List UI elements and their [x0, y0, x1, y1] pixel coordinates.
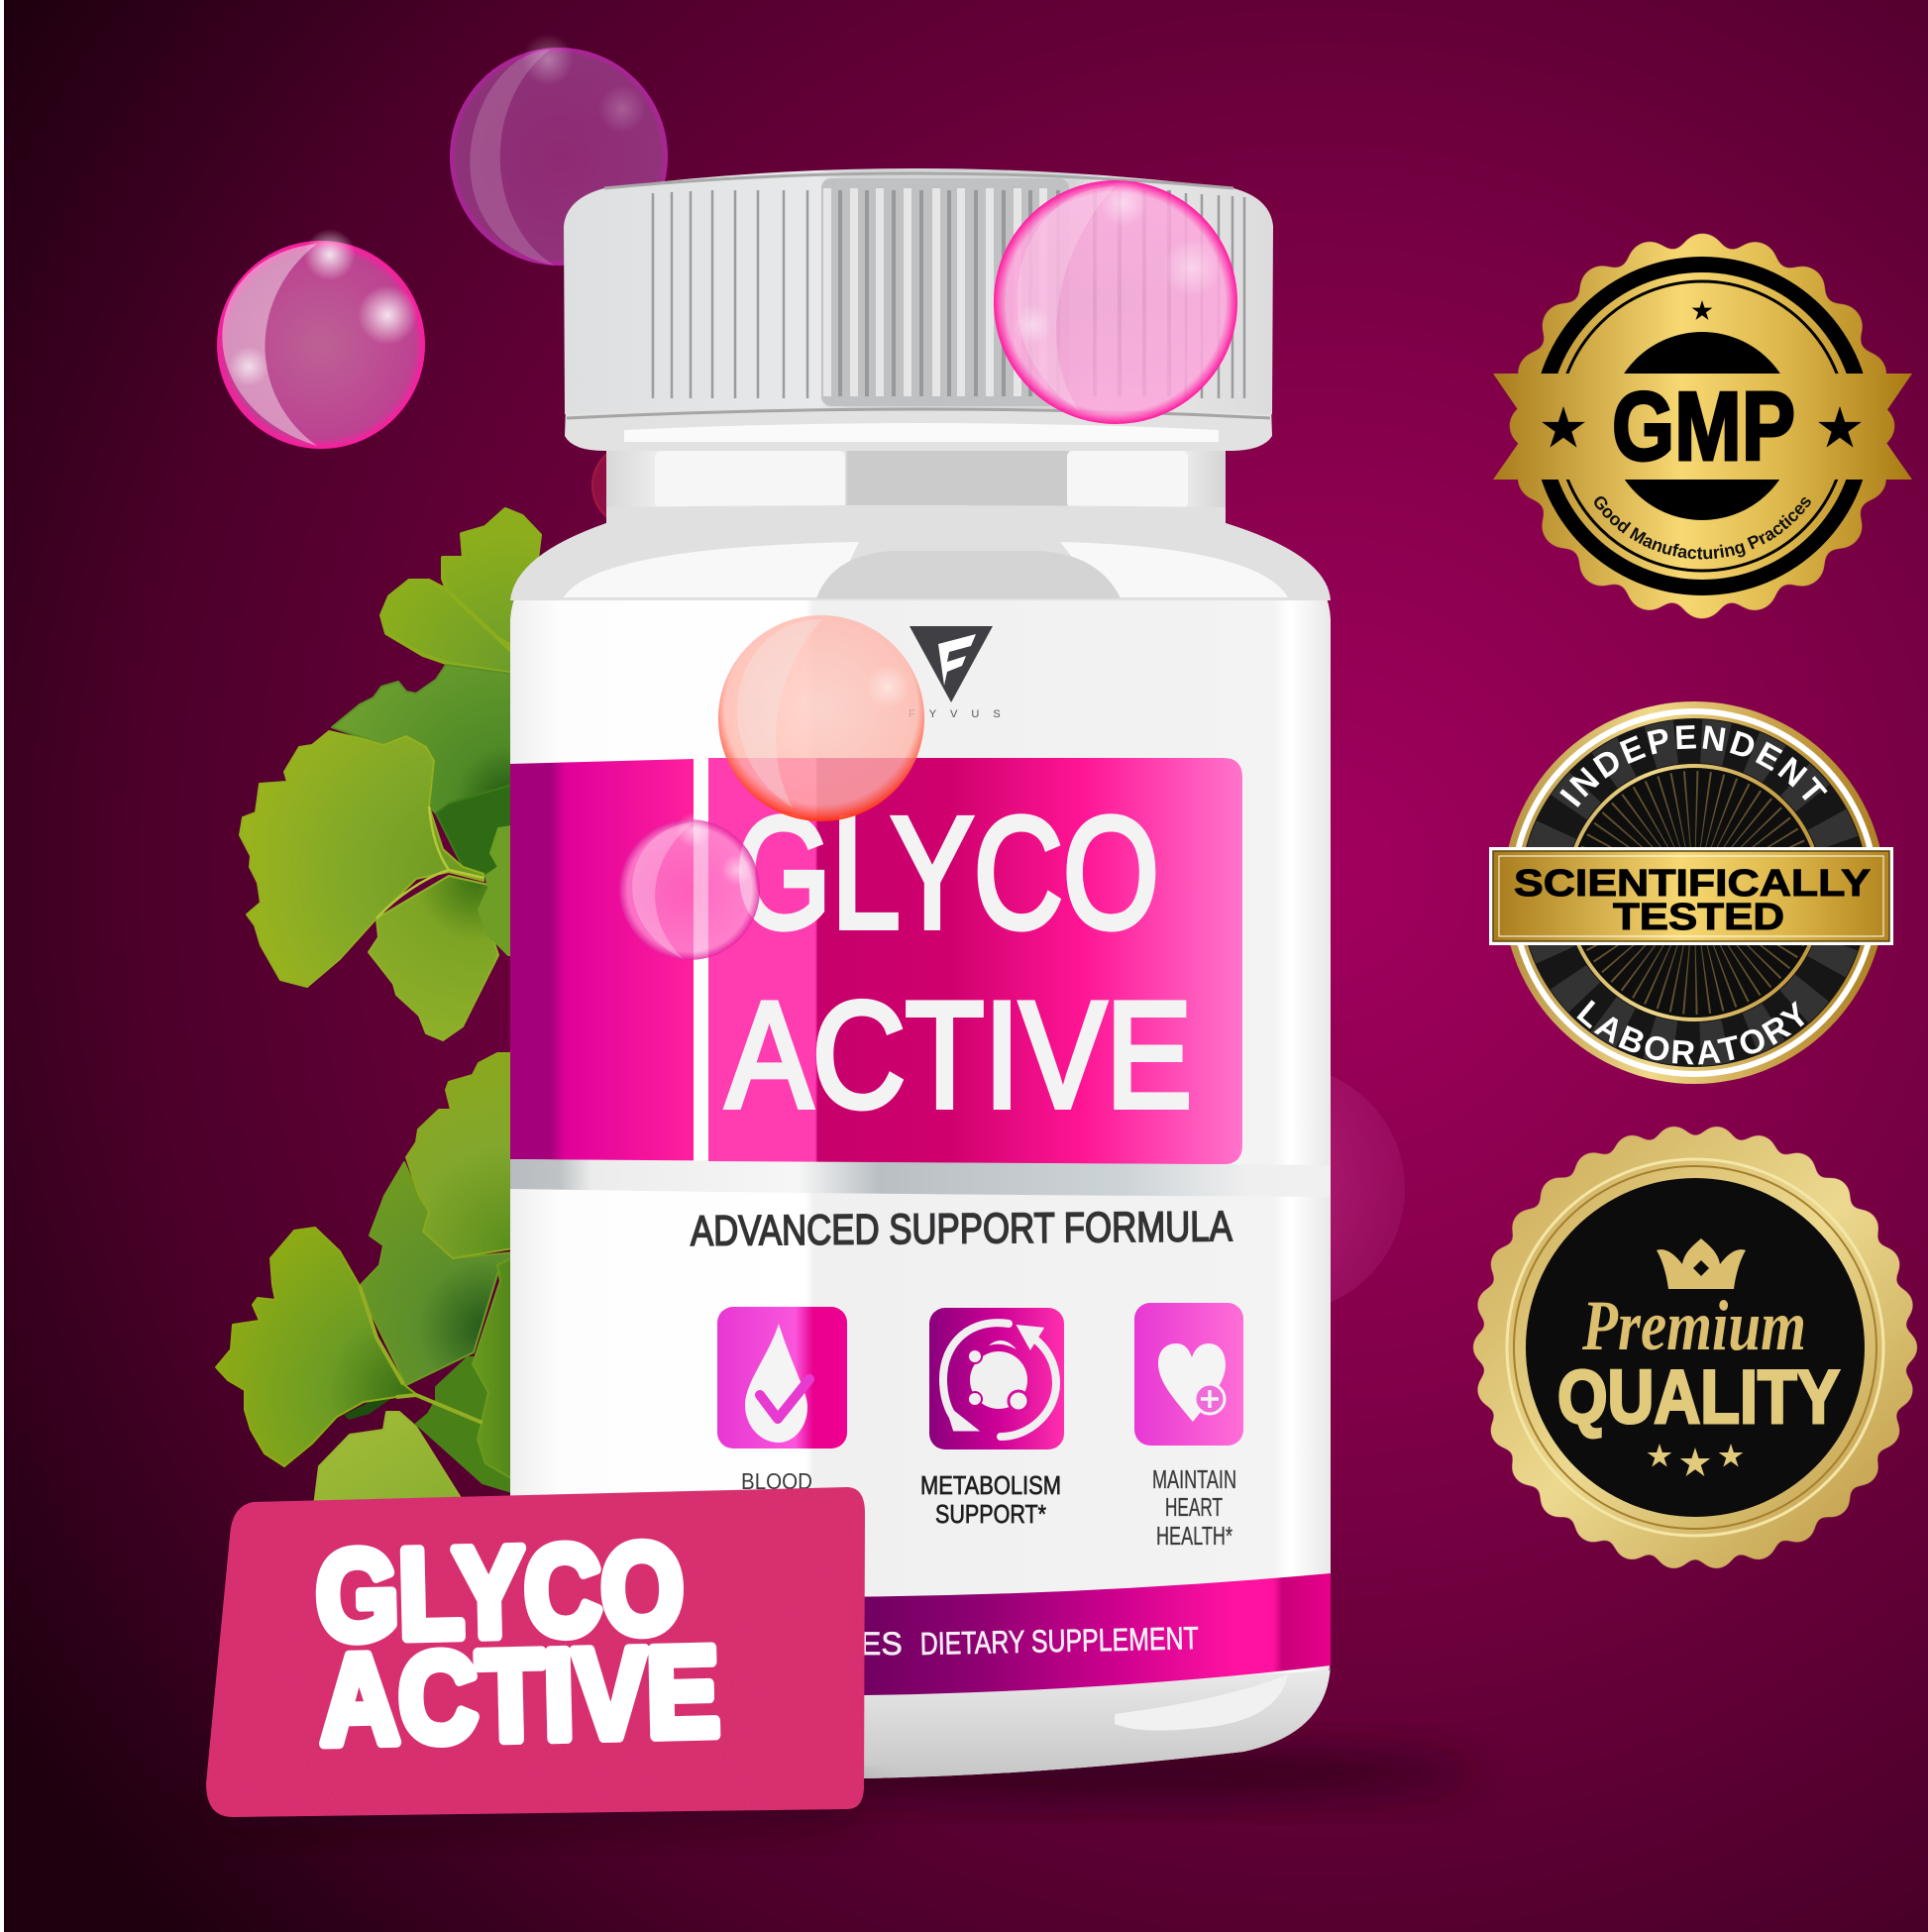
- badge: scientifically tested: LABORATORY: [1576, 1000, 1805, 1064]
- bottom band: [793, 1573, 1331, 1696]
- card shadow: [208, 1788, 864, 1833]
- leaf: lower top: [406, 1053, 525, 1258]
- band text: [860, 1620, 1199, 1662]
- arc text: INDEPENDENT: [1559, 725, 1828, 807]
- leaf: lower far right: [416, 1357, 525, 1496]
- gold seal: [1524, 248, 1880, 604]
- ribbon: [1493, 374, 1912, 480]
- leaf: top lower: [381, 581, 525, 676]
- badge: GMP: [1493, 234, 1912, 618]
- card title: GLYCO: [314, 1518, 686, 1667]
- bottle base shading: [793, 1664, 1331, 1778]
- tagline: ADVANCED SUPPORT FORMULA: [691, 1203, 1232, 1255]
- band text: ES: [860, 1626, 903, 1662]
- bottle shadow: [763, 1748, 1476, 1799]
- bubble: behind bottle right: [1157, 1065, 1405, 1313]
- benefit: maintain heart health: MAINTAIN: [1152, 1464, 1236, 1494]
- badge: scientifically tested: [1489, 701, 1893, 1084]
- leaf: top upper: [443, 509, 540, 654]
- bottle cap: [564, 168, 1273, 414]
- leaf: bottom: [314, 1412, 466, 1506]
- leaf: big lower stem: [360, 1286, 482, 1423]
- sunburst: [1625, 823, 1764, 962]
- stars: [1692, 300, 1712, 320]
- bubble: on cap: [994, 179, 1237, 424]
- bubble: small pink on label: [619, 812, 760, 960]
- bubble: top left purple: [450, 34, 668, 266]
- bubble: behind bottle neck: [592, 444, 676, 527]
- bottle cap ring: [565, 406, 1272, 451]
- badge: scientifically tested: TESTED: [1613, 897, 1784, 938]
- tagline on arc: Good Manufacturing Practices: [1594, 496, 1811, 559]
- benefit: blood: BLOOD: [741, 1468, 812, 1494]
- benefit: maintain heart health: [1152, 1464, 1236, 1551]
- label title: ACTIVE: [726, 971, 1192, 1139]
- leaf: lower right bits: [473, 1251, 525, 1486]
- leaf: small dark: [436, 781, 525, 877]
- benefit: metabolism support: SUPPORT*: [935, 1499, 1046, 1529]
- label title: GLYCO: [735, 784, 1159, 961]
- banner: [1489, 847, 1893, 945]
- benefit: metabolism support: METABOLISM: [920, 1470, 1061, 1500]
- stars: [1648, 1444, 1743, 1476]
- leaf: big upper vein: [376, 806, 483, 918]
- metallic strip: [510, 1159, 1331, 1197]
- bottle shoulder: [510, 505, 1331, 600]
- card title: [314, 1518, 721, 1771]
- label band right panel: [708, 758, 1242, 1164]
- benefit: maintain heart health: HEART: [1165, 1492, 1223, 1522]
- band text: DIETARY SUPPLEMENT: [919, 1620, 1199, 1662]
- banner text: SCIENTIFICALLY: [1514, 863, 1871, 905]
- icon: metabolism: [929, 1308, 1064, 1449]
- label band left: [510, 759, 694, 1161]
- leaf: lower shadow: [344, 1397, 393, 1420]
- GMP text: GMP: [1612, 372, 1795, 481]
- icon: blood drop: [717, 1307, 847, 1449]
- benefit: metabolism support: [920, 1470, 1061, 1529]
- crown: [1657, 1238, 1746, 1289]
- cap dark knurl: [821, 178, 1169, 406]
- label title: [726, 784, 1192, 1139]
- grey rays: [1543, 741, 1846, 1044]
- leaf: right small: [479, 824, 525, 955]
- ginkgo leaves: [216, 509, 540, 1506]
- bottle: [510, 168, 1331, 1778]
- premium script: Premium: [1581, 1286, 1806, 1365]
- quality: QUALITY: [1557, 1355, 1840, 1440]
- bubble: left pink: [217, 229, 425, 449]
- leaf: big upper: [240, 731, 483, 987]
- badge: premium quality: [1485, 1137, 1905, 1557]
- leaf: lower dark: [360, 1162, 525, 1385]
- bottle neck: [606, 444, 1226, 525]
- benefit: maintain heart health: HEALTH*: [1156, 1521, 1232, 1551]
- logo: [909, 626, 1015, 720]
- glyco active card: [206, 1487, 865, 1817]
- card title: ACTIVE: [318, 1621, 721, 1771]
- leaf: middle dark: [332, 665, 525, 813]
- icon: heart: [1134, 1303, 1243, 1446]
- leaf: lower lobe: [369, 876, 498, 1040]
- cap ridges: [653, 190, 1244, 398]
- bubble: orange on label: [718, 615, 924, 821]
- bottle body: [510, 446, 1331, 1778]
- logo: FYVUS: [909, 708, 1015, 720]
- leaf: big lower: [216, 1228, 416, 1466]
